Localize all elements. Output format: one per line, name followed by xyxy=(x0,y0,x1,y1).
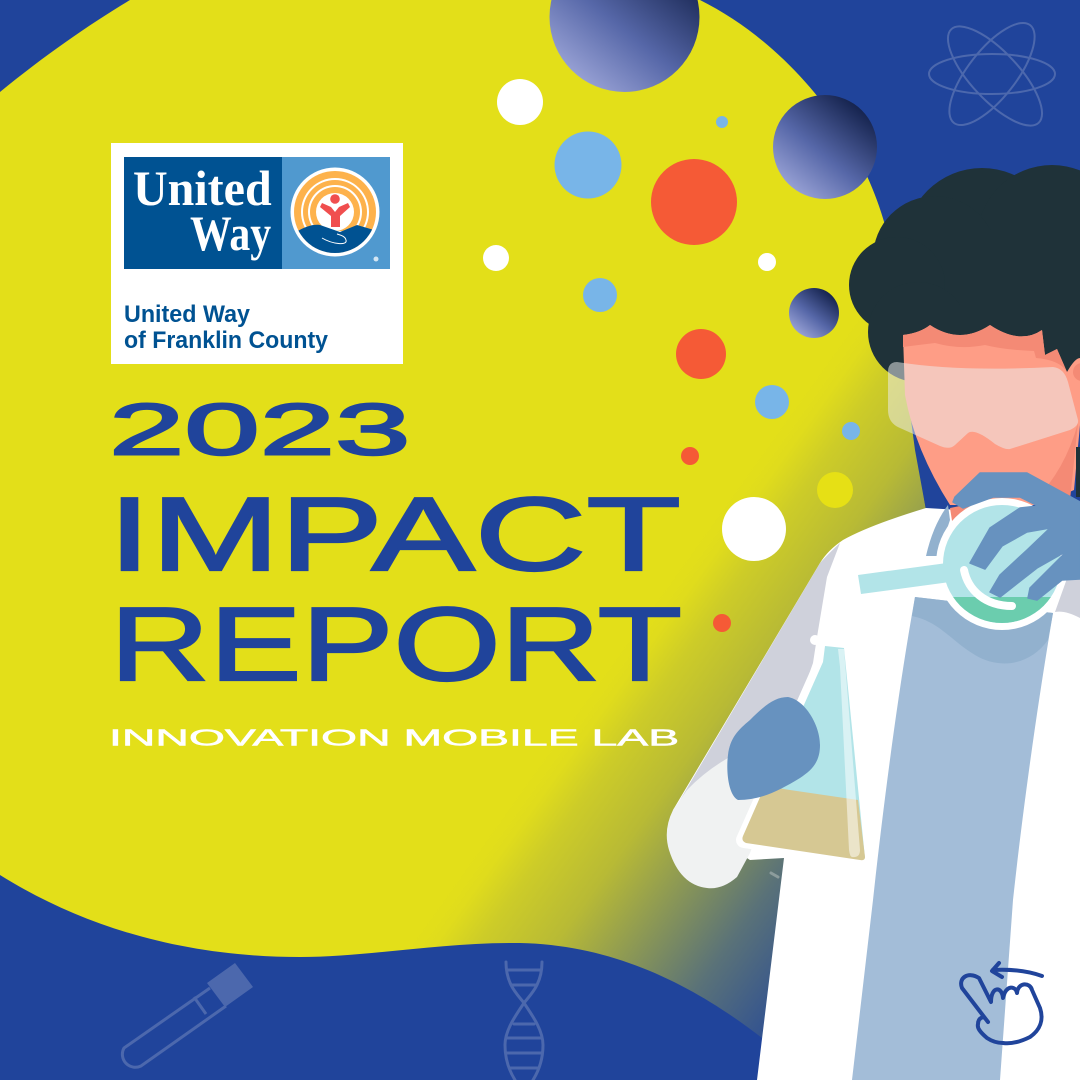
face xyxy=(903,325,1080,505)
icon: atom xyxy=(929,10,1056,139)
neck shadow xyxy=(912,425,970,510)
sleeve shadow xyxy=(680,543,840,800)
scientist xyxy=(667,165,1080,1080)
icon: test tube xyxy=(122,963,253,1067)
icon: faint mark near sleeve xyxy=(771,873,778,877)
ear xyxy=(1073,363,1080,381)
sleeve cuff xyxy=(667,753,770,888)
lower hand xyxy=(727,697,820,800)
title: impact: IMPACT xyxy=(108,476,681,592)
title: 2023: 2023 xyxy=(109,389,410,471)
logo card: United Way xyxy=(124,301,251,328)
forehead shade xyxy=(903,325,1067,372)
neck skin xyxy=(950,500,990,540)
shirt collar shadow xyxy=(912,597,1053,663)
logo card: of Franklin County xyxy=(124,327,329,354)
subtitle: INNOVATION MOBILE LAB xyxy=(109,724,679,751)
goggles xyxy=(888,362,1078,449)
icon: swipe hand xyxy=(961,963,1042,1043)
bubbles xyxy=(483,79,860,632)
shirt strip xyxy=(852,597,1053,1080)
gradient spheres xyxy=(550,0,877,338)
title: report: REPORT xyxy=(110,585,682,702)
lab coat xyxy=(673,508,1080,1080)
right side shadow xyxy=(1055,570,1080,618)
logo card: Way xyxy=(190,205,271,261)
upper glove xyxy=(953,473,1080,600)
flask xyxy=(742,635,865,860)
icon: DNA helix xyxy=(505,962,543,1080)
petri dish xyxy=(858,498,1070,637)
hair xyxy=(849,165,1080,382)
logo card xyxy=(111,143,403,364)
hair strip at the right edge xyxy=(1076,447,1080,497)
collar xyxy=(926,505,950,556)
logo card: United xyxy=(133,160,272,216)
jaw shade xyxy=(1035,423,1078,500)
